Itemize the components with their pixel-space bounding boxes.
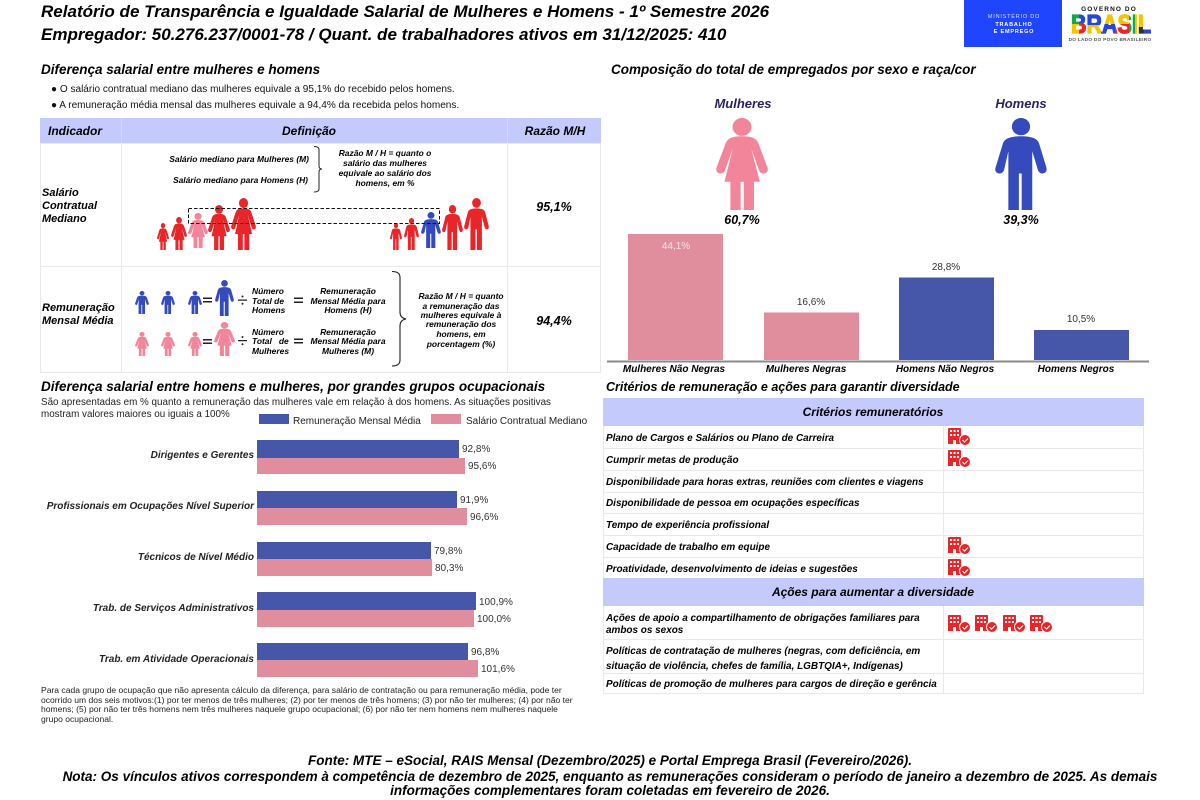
definition text: remuneração mulheres [310, 327, 386, 356]
bar chart: composição por sexo e raça: Mulheres Não Negras [623, 364, 726, 375]
legend: Salário Contratual Mediano [466, 416, 588, 427]
group: Profissionais: 91,9% [460, 495, 488, 506]
criteria list: Cumprir metas de produção [606, 455, 739, 466]
footnote: ocorrido um dos seis motivos:(1) por ter menos de três mulheres; (2) por ter menos de três homens; (3) por não ter mulheres; (4) por não ter [41, 695, 573, 705]
text block: descrição: mostram valores maiores ou iguais a 100% [41, 409, 230, 420]
logo: Ministério do Trabalho e Emprego: MINISTÉRIO DO [988, 13, 1040, 20]
title [41, 2, 770, 44]
definition text: razão salário [339, 148, 432, 188]
definition text: remuneração mulheres: Remuneração [320, 327, 376, 337]
figure: mulheres: 60,7% [724, 213, 760, 227]
row label: salário contratual mediano [42, 187, 98, 225]
definition text: número total de homens: Homens [252, 305, 286, 315]
definition text: remuneração mulheres: Mensal Média para [310, 336, 386, 346]
criteria list: Tempo de experiência profissional [606, 520, 769, 531]
group: Dirigentes e Gerentes [151, 440, 496, 474]
footnote [41, 685, 573, 724]
bar chart: composição por sexo e raça: 44,1% [662, 241, 690, 252]
definition text: razão remuneração: mulheres equivale à [421, 310, 502, 320]
footer: fonte e nota: informações complementares foram coletadas em fevereiro de 2026. [390, 783, 830, 798]
title: Relatório de Transparência e Igualdade Salarial de Mulheres e Homens - 1º Semestre 2026 [41, 2, 770, 21]
definition text: número total de mulheres: Número [252, 327, 284, 337]
criteria list [606, 433, 924, 575]
text block: bullets: ● A remuneração média mensal das mulheres equivale a 94,4% da recebida pelos homens. [51, 100, 459, 111]
group: Atividade Operacional: Trab. em Atividade Operacionais [99, 654, 254, 665]
definition text: remuneração mulheres: Mulheres (M) [322, 346, 374, 356]
bar chart: composição por sexo e raça: 28,8% [932, 262, 960, 273]
group: Serviços Administrativos: Trab. de Serviços Administrativos [93, 603, 254, 614]
action list: situação de violência, chefes de família, LGBTQIA+, Indígenas) [606, 661, 904, 672]
figure: homens [995, 96, 1047, 227]
action list: Políticas de promoção de mulheres para cargos de direção e gerência [606, 679, 937, 690]
definition text: salário mediano [169, 154, 309, 185]
group: Dirigentes e Gerentes: 92,8% [462, 444, 490, 455]
group: Técnicos: 80,3% [435, 563, 463, 574]
definition text: razão salário: Razão M / H = quanto o [339, 148, 431, 158]
definition text: remuneração homens [310, 286, 386, 315]
logo: Ministério do Trabalho e Emprego: TRABALHO [995, 22, 1033, 28]
panel: ações para aumentar a diversidade: Ações para aumentar a diversidade [771, 585, 974, 599]
text block: descrição: São apresentadas em % quanto a remuneração das mulheres vale em relação à dos homens. As situações positivas [41, 397, 551, 408]
heading: critérios: Critérios de remuneração e ações para garantir diversidade [606, 380, 960, 394]
definition text: número total de mulheres: Total de [252, 336, 289, 346]
row label: salário contratual mediano: Contratual [42, 200, 98, 212]
group: Serviços Administrativos: 100,0% [477, 614, 511, 625]
row label: salário contratual mediano: Salário [42, 187, 79, 199]
group: Atividade Operacional: 101,6% [481, 664, 515, 675]
criteria list: Capacidade de trabalho em equipe [606, 542, 770, 553]
row label: remuneração mensal média: Mensal Média [42, 315, 114, 327]
bar chart: grupos ocupacionais [47, 440, 515, 677]
text block: descrição [41, 397, 551, 420]
definition text: remuneração homens: Remuneração [320, 286, 376, 296]
group: Profissionais: 96,6% [470, 512, 498, 523]
icons: building check [948, 615, 1052, 632]
heading: diferença salarial: Diferença salarial entre mulheres e homens [41, 62, 321, 77]
definition text: salário mediano: Salário mediano para Mulheres (M) [169, 154, 309, 164]
icons: men by salary [390, 198, 489, 250]
figure: homens: Homens [995, 96, 1047, 111]
bar chart: composição por sexo e raça: 16,6% [797, 297, 825, 308]
panel: critérios remuneratórios [603, 398, 1144, 578]
value: 94,4%: 94,4% [536, 314, 572, 328]
dashed median connector [188, 208, 440, 224]
footer: fonte e nota: Fonte: MTE – eSocial, RAIS Mensal (Dezembro/2025) e Portal Emprega Brasil (Fevereiro/2026). [308, 753, 912, 768]
logo: Ministério do Trabalho e Emprego: E EMPREGO [994, 29, 1034, 35]
logo: Ministério do Trabalho e Emprego [964, 0, 1062, 47]
icons: women equation [135, 322, 235, 356]
icons: men equation [135, 280, 234, 316]
figure: mulheres: Mulheres [714, 96, 772, 111]
definition text: número total de homens: Total de [252, 296, 284, 306]
definition text: razão salário: equivale ao salário dos [339, 168, 432, 178]
math operators [203, 296, 303, 345]
definition text: salário mediano: Salário mediano para Homens (H) [173, 175, 308, 185]
table header: Indicador [48, 124, 103, 138]
group: Técnicos [138, 542, 463, 576]
definition text: razão remuneração: remuneração dos [426, 319, 496, 329]
row label: salário contratual mediano: Mediano [42, 213, 87, 225]
table header: Razão M/H [525, 124, 586, 138]
group: Técnicos: Técnicos de Nível Médio [138, 552, 254, 563]
bar chart: composição por sexo e raça [607, 234, 1149, 375]
definition text: número total de mulheres [252, 327, 289, 356]
definition text: razão remuneração [418, 291, 504, 349]
bar chart: composição por sexo e raça: Mulheres Negras [766, 364, 847, 375]
group: Técnicos: 79,8% [434, 546, 462, 557]
legend [259, 414, 588, 427]
action list: Políticas de contratação de mulheres (negras, com deficiência, em [606, 646, 920, 657]
footer: fonte e nota [63, 753, 1158, 798]
definition text: número total de homens [252, 286, 286, 315]
panel: ações para aumentar a diversidade [603, 578, 1144, 694]
definition text: razão salário: homens, em % [355, 178, 415, 188]
group: Profissionais: Profissionais em Ocupações Nível Superior [47, 501, 255, 512]
definition text: remuneração homens: Mensal Média para [310, 296, 386, 306]
footnote: grupo ocupacional. [41, 714, 113, 724]
footnote: Para cada grupo de ocupação que não apresenta cálculo da diferença, para salário de contratação ou para remuneração média, pode ter [41, 685, 562, 695]
group: Dirigentes e Gerentes: Dirigentes e Gerentes [151, 450, 254, 461]
group: Atividade Operacional: 96,8% [471, 647, 499, 658]
criteria list: Disponibilidade para horas extras, reuniões com clientes e viagens [606, 477, 924, 488]
bar chart: composição por sexo e raça: 10,5% [1067, 314, 1095, 325]
group: Atividade Operacional [99, 643, 515, 677]
definition text: razão remuneração: a remuneração das [423, 301, 500, 311]
icons: women by salary [157, 198, 256, 250]
group: Serviços Administrativos: 100,9% [479, 597, 513, 608]
figure: mulheres [714, 96, 772, 227]
group: Profissionais [47, 491, 498, 525]
legend: Remuneração Mensal Média [293, 416, 421, 427]
action list: ambos os sexos [606, 625, 684, 636]
criteria list: Proatividade, desenvolvimento de ideias e sugestões [606, 564, 858, 575]
row label: remuneração mensal média: Remuneração [42, 302, 115, 314]
value: 95,1%: 95,1% [536, 200, 572, 214]
table header [48, 124, 586, 138]
large brace [392, 272, 406, 366]
panel: critérios remuneratórios: Critérios remuneratórios [803, 405, 944, 419]
logo: Governo do Brasil: DO LADO DO POVO BRASILEIRO [1069, 37, 1151, 42]
table header: Definição [282, 124, 336, 138]
row label: remuneração mensal média [42, 302, 115, 327]
action list: Ações de apoio a compartilhamento de obrigações familiares para [605, 613, 920, 624]
definition text: razão remuneração: Razão M / H = quanto [418, 291, 504, 301]
figure: homens: 39,3% [1003, 213, 1039, 227]
logo: Governo do Brasil [1069, 6, 1151, 42]
bar chart: composição por sexo e raça: Homens Não Negros [896, 364, 995, 375]
group: Dirigentes e Gerentes: 95,6% [468, 461, 496, 472]
logo: Governo do Brasil: BRASIL [1071, 9, 1151, 39]
definition text: remuneração homens: Homens (H) [324, 305, 372, 315]
definition text: razão salário: salário das mulheres [343, 158, 427, 168]
title: Empregador: 50.276.237/0001-78 / Quant. de trabalhadores ativos em 31/12/2025: 410 [41, 25, 727, 44]
footnote: homens; (5) por não ter três homens nem três mulheres naquele grupo ocupacional; (6) por não ter nem homens nem mulheres naquele [41, 704, 558, 714]
bar chart: composição por sexo e raça: Homens Negros [1038, 364, 1115, 375]
heading: grupos ocupacionais: Diferença salarial entre homens e mulheres, por grandes grupos ocupacionais [41, 379, 546, 394]
criteria list: Disponibilidade de pessoa em ocupações específicas [606, 498, 860, 509]
icons: building check [948, 428, 970, 576]
definition text: número total de mulheres: Mulheres [252, 346, 289, 356]
criteria list: Plano de Cargos e Salários ou Plano de Carreira [606, 433, 835, 444]
footer: fonte e nota: Nota: Os vínculos ativos correspondem à competência de dezembro de 2025, enquanto as remunerações consideram o período de janeiro a dezembro de 2025. As demais [63, 769, 1158, 784]
text block: bullets: ● O salário contratual mediano das mulheres equivale a 95,1% do recebido pelos homens. [51, 84, 455, 95]
action list [605, 613, 937, 690]
brace [314, 146, 322, 192]
text block: bullets [51, 84, 459, 111]
logo: Governo do Brasil: GOVERNO DO [1081, 6, 1137, 13]
definition text: número total de homens: Número [252, 286, 284, 296]
heading: composição: Composição do total de empregados por sexo e raça/cor [611, 62, 976, 77]
panel: tabela de indicadores [40, 118, 601, 372]
definition text: razão remuneração: homens, em [436, 329, 486, 339]
group: Serviços Administrativos [93, 592, 513, 627]
definition text: razão remuneração: porcentagem (%) [426, 339, 495, 349]
